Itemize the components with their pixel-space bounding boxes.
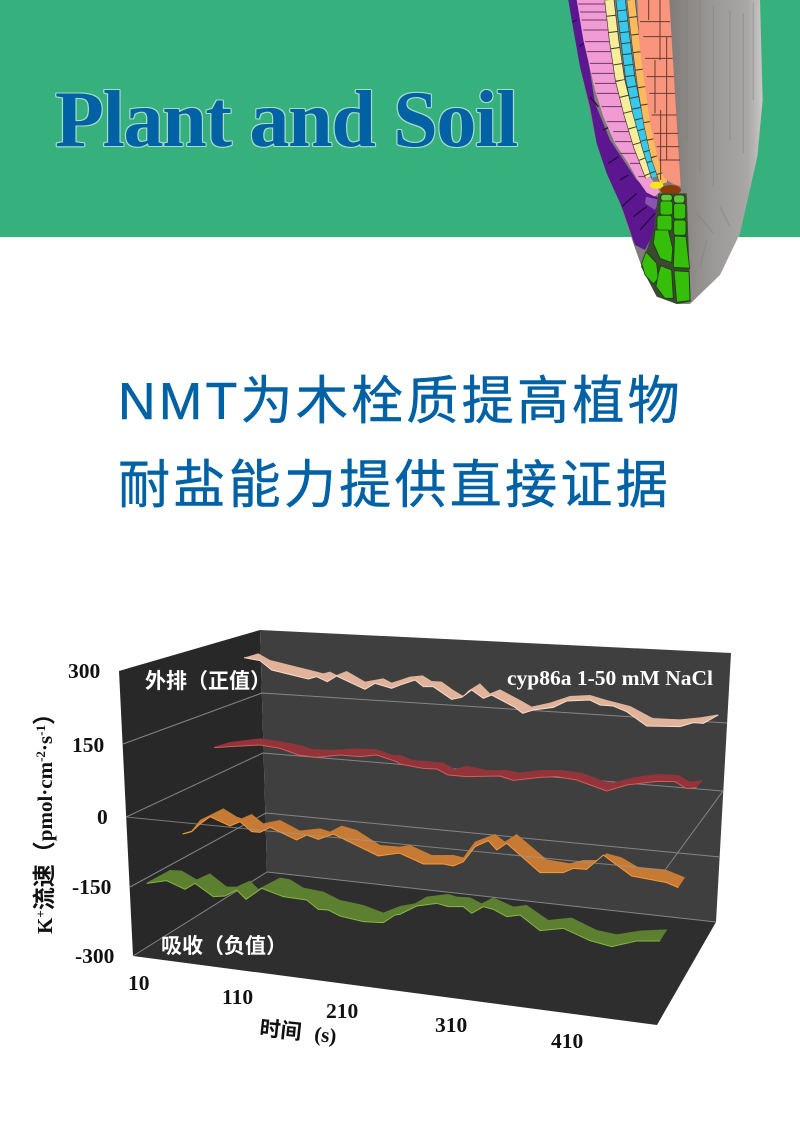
icon: root tip micrograph xyxy=(568,0,763,304)
label: genotype treatment: cyp86a 1-50 mM NaCl xyxy=(507,666,713,690)
headline line 1: NMT为木栓质提高植物 xyxy=(118,373,683,431)
salmon stele cells xyxy=(637,0,681,186)
y axis title: ） xyxy=(31,702,57,725)
y axis title: pmol·cm xyxy=(33,762,57,841)
root surface streaks xyxy=(687,0,753,267)
header band xyxy=(0,0,800,237)
x axis title: 时间 (s) xyxy=(258,1016,338,1048)
series: efflux peach ribbon xyxy=(244,653,718,727)
x axis ticks: 210 xyxy=(326,999,358,1023)
x axis ticks: 10 xyxy=(128,971,150,995)
y axis title: -2 xyxy=(33,751,48,762)
y axis ticks: -300 xyxy=(75,944,114,968)
x axis ticks: 410 xyxy=(551,1029,583,1053)
y axis title: ·s xyxy=(33,736,57,751)
y axis ticks xyxy=(68,659,114,968)
y axis title: 流速（ xyxy=(31,841,57,910)
chart left wall xyxy=(119,630,267,956)
y axis title: K xyxy=(33,918,57,934)
series: red ribbon xyxy=(214,738,703,791)
green root cap cells xyxy=(642,194,690,302)
label: uptake negative: 吸收（负值） xyxy=(161,935,287,958)
yellow initial cell xyxy=(650,182,663,189)
label: efflux positive: 外排（正值） xyxy=(145,670,271,693)
x axis ticks: 310 xyxy=(435,1013,467,1037)
x axis ticks: 110 xyxy=(222,985,253,1009)
orange vascular cells xyxy=(631,0,664,183)
journal title: Plant and Soil xyxy=(55,76,517,164)
y axis ticks: 0 xyxy=(97,805,108,829)
dark backing of root cap xyxy=(641,193,691,304)
series: green ribbon xyxy=(147,870,667,947)
x axis ticks xyxy=(128,971,583,1053)
chart back wall xyxy=(260,630,731,922)
cyan pericycle cells xyxy=(621,0,656,177)
series: orange ribbon xyxy=(183,808,685,888)
purple epidermis cells xyxy=(568,0,661,250)
y axis ticks: 150 xyxy=(72,733,104,757)
y axis ticks: 300 xyxy=(68,659,100,683)
y axis title: + xyxy=(33,910,48,918)
root body xyxy=(568,0,763,304)
chart floor xyxy=(133,872,716,1025)
y axis ticks: -150 xyxy=(72,875,111,899)
brown quiescent centre xyxy=(660,185,681,195)
y axis title: -1 xyxy=(33,725,48,736)
headline line 2: 耐盐能力提供直接证据 xyxy=(118,457,671,515)
cream endodermis cells xyxy=(609,0,650,177)
pink cortex cells xyxy=(577,0,660,197)
